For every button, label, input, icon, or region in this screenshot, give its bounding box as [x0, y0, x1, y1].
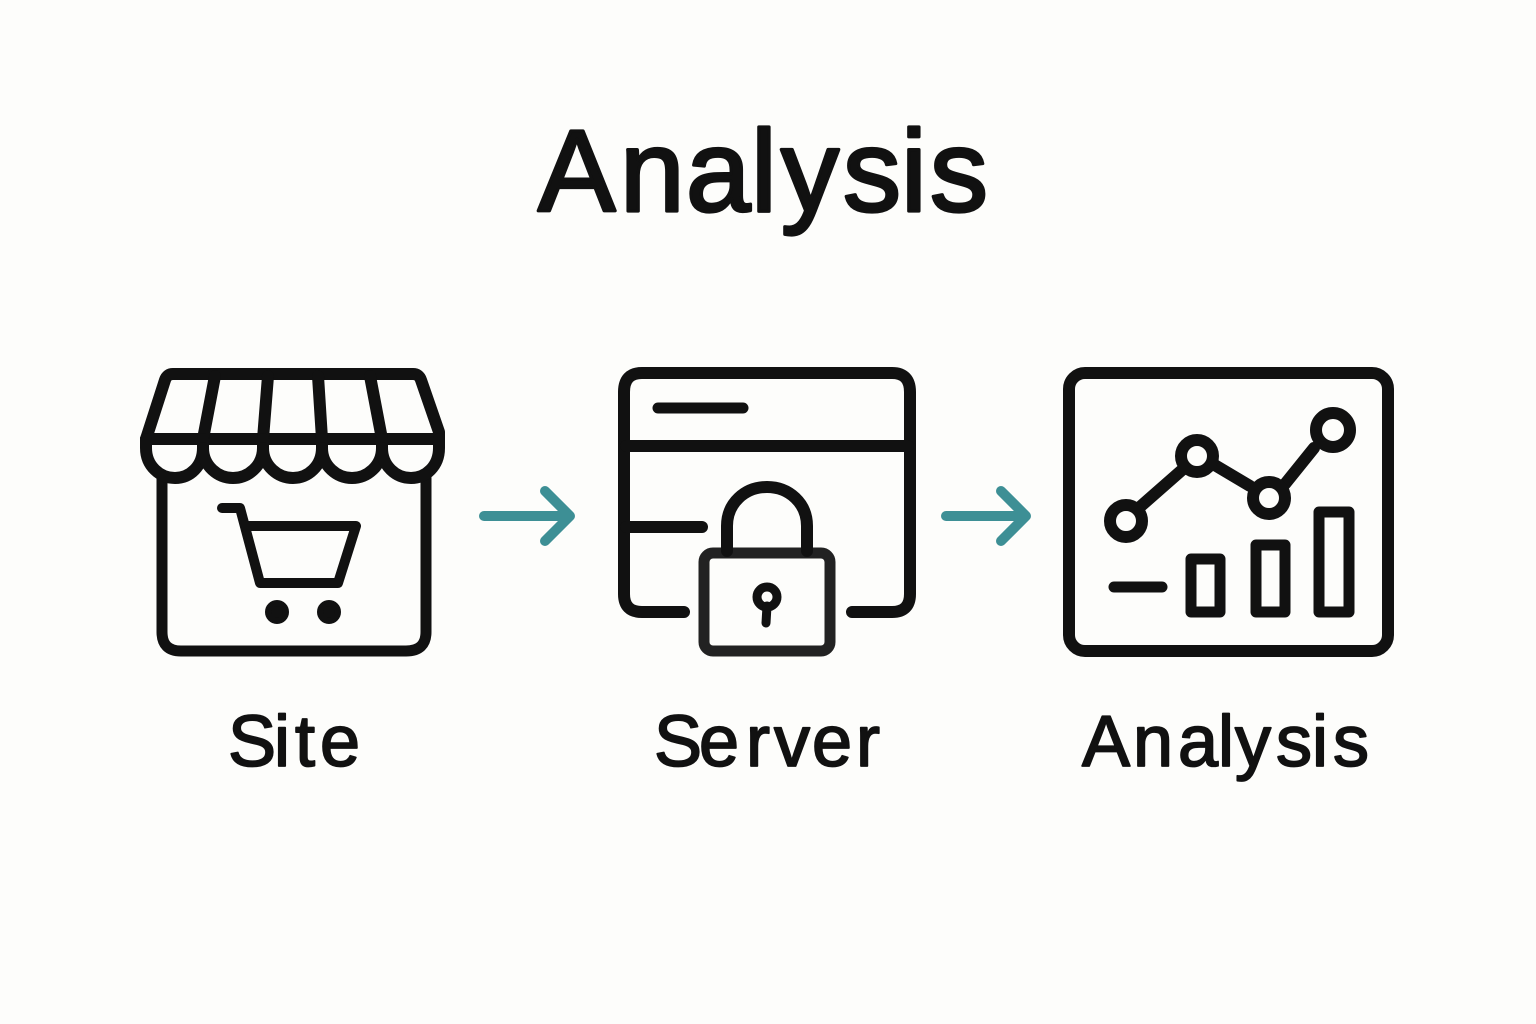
title: Analysis — [538, 106, 988, 236]
line chart — [1110, 413, 1350, 537]
icon: browser window with padlock — [624, 373, 910, 651]
arrow: server to analysis — [946, 491, 1026, 541]
label: site: Site — [228, 702, 360, 782]
awning — [146, 374, 439, 478]
cart — [222, 508, 356, 621]
icon: analytics dashboard — [1069, 373, 1388, 651]
label: server: Server — [654, 702, 880, 782]
arrow: site to server — [484, 491, 570, 541]
label: analysis: Analysis — [1082, 702, 1369, 782]
icon: storefront with cart — [146, 374, 439, 651]
bar chart — [1114, 512, 1349, 612]
padlock — [704, 487, 830, 651]
